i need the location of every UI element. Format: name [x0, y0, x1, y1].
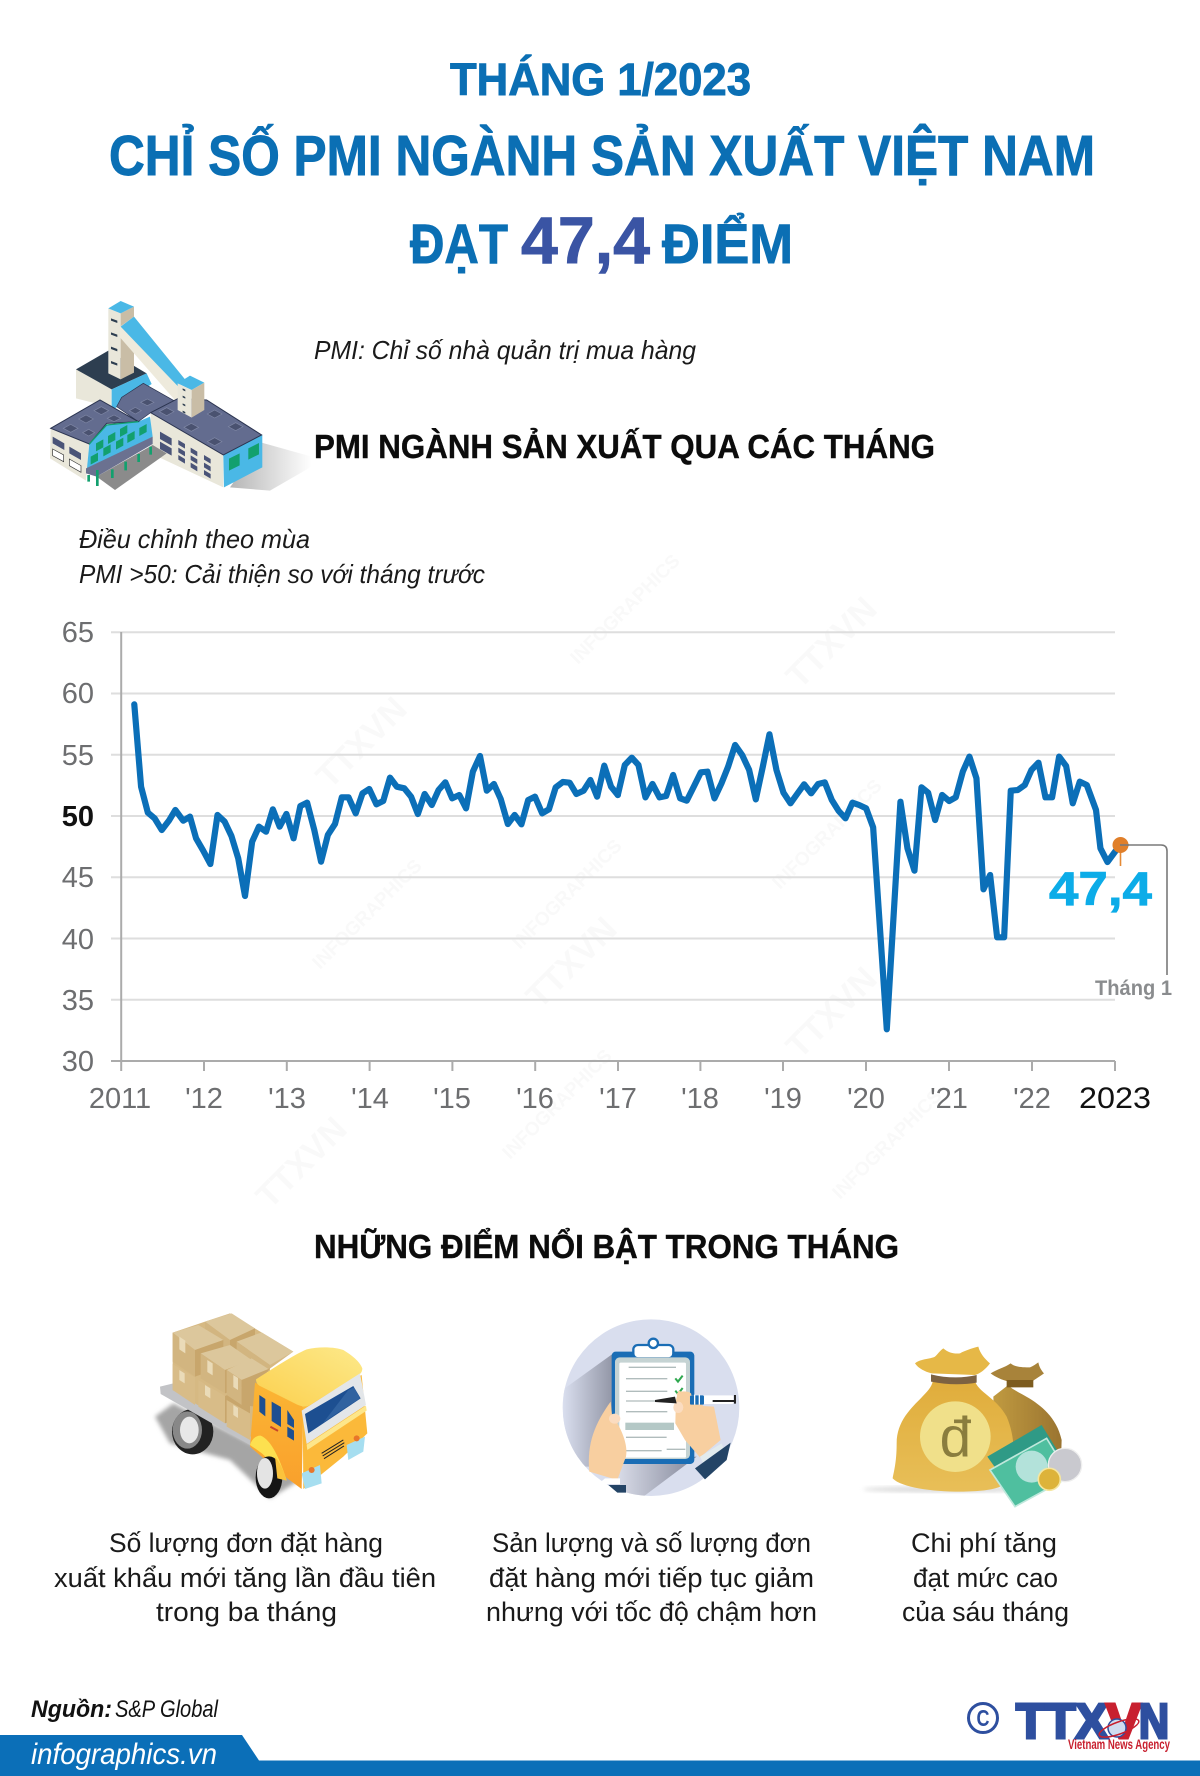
y axis labels: 40	[62, 924, 94, 956]
footer url: infographics.vn	[31, 1738, 217, 1771]
x axis labels: '14	[351, 1083, 389, 1115]
x axis labels	[89, 1082, 1151, 1115]
heading: highlights: NHỮNG ĐIỂM NỔI BẬT TRONG THÁNG	[314, 1228, 899, 1265]
cab	[250, 1347, 367, 1498]
caption 1: trong ba tháng	[156, 1597, 337, 1627]
caption 1: Số lượng đơn đặt hàng	[109, 1528, 383, 1558]
title line 1: THÁNG 1/2023	[450, 54, 751, 105]
logo: TTXVN: C	[976, 1705, 990, 1731]
text: INFOGRAPHICS	[499, 1046, 617, 1164]
icon: delivery truck	[155, 1313, 367, 1498]
text: INFOGRAPHICS	[509, 836, 627, 954]
headline value: 47,4	[521, 203, 650, 277]
x axis labels: '22	[1013, 1083, 1051, 1115]
title line 3 suffix: ĐIỂM	[662, 212, 793, 275]
chart notes: Điều chỉnh theo mùa	[79, 524, 310, 554]
heading: chart section: PMI NGÀNH SẢN XUẤT QUA CÁC THÁNG	[314, 428, 935, 465]
x axis labels: 2011	[89, 1083, 151, 1115]
caption 3: của sáu tháng	[902, 1597, 1069, 1627]
icon: money bags: đ	[940, 1407, 972, 1470]
caption 3	[902, 1528, 1069, 1627]
source: Nguồn:	[31, 1696, 112, 1723]
note: PMI definition: PMI: Chỉ số nhà quản trị mua hàng	[314, 335, 697, 365]
y axis labels: 45	[62, 862, 94, 894]
month label: Tháng 1	[1095, 977, 1172, 1000]
caption 3: đạt mức cao	[913, 1563, 1058, 1593]
logo: TTXVN: TTX	[1016, 1695, 1108, 1749]
x axis labels: '13	[268, 1083, 306, 1115]
text: INFOGRAPHICS	[309, 856, 427, 974]
y axis labels: 30	[62, 1046, 94, 1078]
text: INFOGRAPHICS	[567, 551, 685, 669]
latest data point	[1112, 837, 1128, 853]
cargo boxes	[173, 1313, 293, 1440]
chart notes: PMI >50: Cải thiện so với tháng trước	[79, 559, 485, 589]
logo: TTXVN: N	[1139, 1695, 1169, 1749]
orange pin	[1120, 845, 1122, 866]
y axis labels: 35	[62, 985, 94, 1017]
y axis labels: 65	[62, 617, 94, 649]
title	[109, 54, 1095, 277]
icon: money bags	[863, 1347, 1082, 1507]
data line	[134, 704, 1120, 1029]
y axis labels: 55	[62, 740, 94, 772]
title line 3 prefix: ĐẠT	[410, 212, 508, 275]
icon: factory	[50, 301, 312, 491]
caption 1	[54, 1528, 436, 1627]
x axis labels: '19	[764, 1083, 802, 1115]
icon: clipboard and hands	[563, 1319, 739, 1497]
x axis labels: '16	[516, 1083, 554, 1115]
text: INFOGRAPHICS	[769, 776, 887, 894]
text: TTXVN	[309, 690, 414, 796]
caption 2	[486, 1528, 817, 1627]
x axis labels: '15	[433, 1083, 471, 1115]
logo: TTXVN: V	[1106, 1695, 1141, 1749]
x axis labels: '21	[930, 1083, 968, 1115]
line chart: PMI 2011-2023	[62, 617, 1172, 1115]
x axis labels: 2023	[1079, 1082, 1151, 1115]
leader line to month label	[1120, 845, 1167, 975]
x axis labels: '20	[847, 1083, 885, 1115]
text: TTXVN	[779, 590, 884, 696]
logo: TTXVN	[968, 1695, 1170, 1752]
caption 1: xuất khẩu mới tăng lần đầu tiên	[54, 1563, 436, 1593]
x axis labels: '12	[185, 1083, 223, 1115]
x axis labels: '17	[599, 1083, 637, 1115]
caption 3: Chi phí tăng	[911, 1528, 1057, 1558]
source: S&P Global	[115, 1696, 219, 1723]
y axis labels: 60	[62, 678, 94, 710]
caption 2: Sản lượng và số lượng đơn	[492, 1528, 811, 1558]
y axis labels	[62, 617, 94, 1078]
footer band	[0, 1735, 1200, 1776]
text: TTXVN	[779, 960, 884, 1066]
text: INFOGRAPHICS	[829, 1086, 947, 1204]
text: TTXVN	[519, 910, 624, 1016]
chart notes	[79, 524, 485, 589]
latest value: 47,4	[1049, 862, 1152, 915]
caption 2: đặt hàng mới tiếp tục giảm	[489, 1563, 814, 1593]
source	[31, 1696, 219, 1723]
caption 2: nhưng với tốc độ chậm hơn	[486, 1597, 817, 1627]
x axis labels: '18	[681, 1083, 719, 1115]
y axis labels: 50	[62, 801, 94, 833]
text: TTXVN	[249, 1110, 354, 1216]
